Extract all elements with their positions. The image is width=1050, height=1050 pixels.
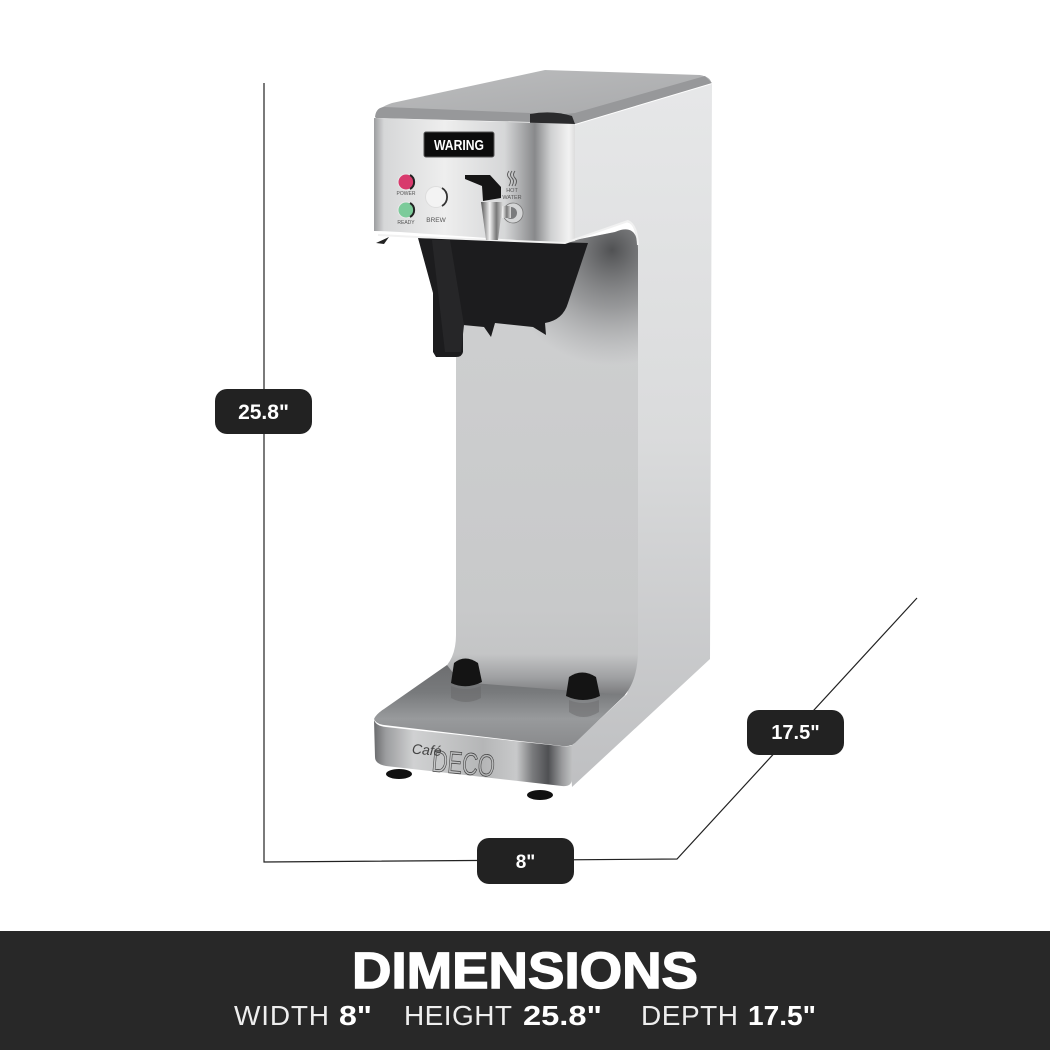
hot water label: WATER — [502, 195, 522, 201]
logo: Cafe Deco: DECO — [431, 743, 496, 784]
dimensions summary: DEPTH — [641, 1000, 738, 1031]
depth label — [747, 710, 844, 755]
brand badge — [424, 132, 494, 157]
depth label: 17.5" — [771, 722, 820, 744]
shadow under head — [456, 229, 638, 400]
brand badge: WARING — [434, 137, 484, 154]
hot water label — [502, 171, 522, 201]
logo: Cafe Deco — [410, 741, 496, 784]
product: coffee brewer — [374, 70, 712, 800]
clip under head — [376, 237, 389, 244]
head front — [374, 118, 575, 243]
indicator: ready — [397, 202, 415, 226]
width label — [477, 838, 574, 884]
base plate — [374, 665, 625, 746]
hot water tap — [465, 175, 523, 240]
height label — [215, 389, 312, 434]
column front panel — [376, 229, 638, 745]
head lower edge — [378, 221, 638, 245]
base front — [374, 720, 572, 786]
dimensions summary: 17.5" — [748, 1000, 816, 1031]
indicator: power: POWER — [397, 191, 416, 197]
dimensions summary: 25.8" — [523, 1000, 602, 1031]
dimension lines — [264, 83, 917, 862]
footer banner — [0, 931, 1050, 1050]
brew button — [426, 186, 447, 224]
height label: 25.8" — [238, 401, 289, 424]
hot water label: HOT — [506, 188, 518, 194]
dimensions summary — [234, 1000, 816, 1031]
dimensions summary: WIDTH — [234, 1000, 329, 1031]
top front rim — [375, 76, 712, 124]
brew button: BREW — [426, 217, 447, 224]
dimensions summary: 8" — [339, 1000, 372, 1031]
indicator: ready: READY — [397, 220, 415, 226]
brew basket — [418, 238, 588, 357]
dimensions summary: HEIGHT — [404, 1000, 512, 1031]
rubber pegs — [451, 658, 600, 717]
logo: Cafe Deco: Café — [411, 741, 442, 759]
top surface — [376, 70, 711, 116]
machine side wall — [570, 84, 712, 787]
heading: DIMENSIONS — [352, 942, 698, 999]
indicator: power — [397, 174, 416, 197]
feet — [386, 769, 553, 800]
width label: 8" — [516, 852, 535, 873]
